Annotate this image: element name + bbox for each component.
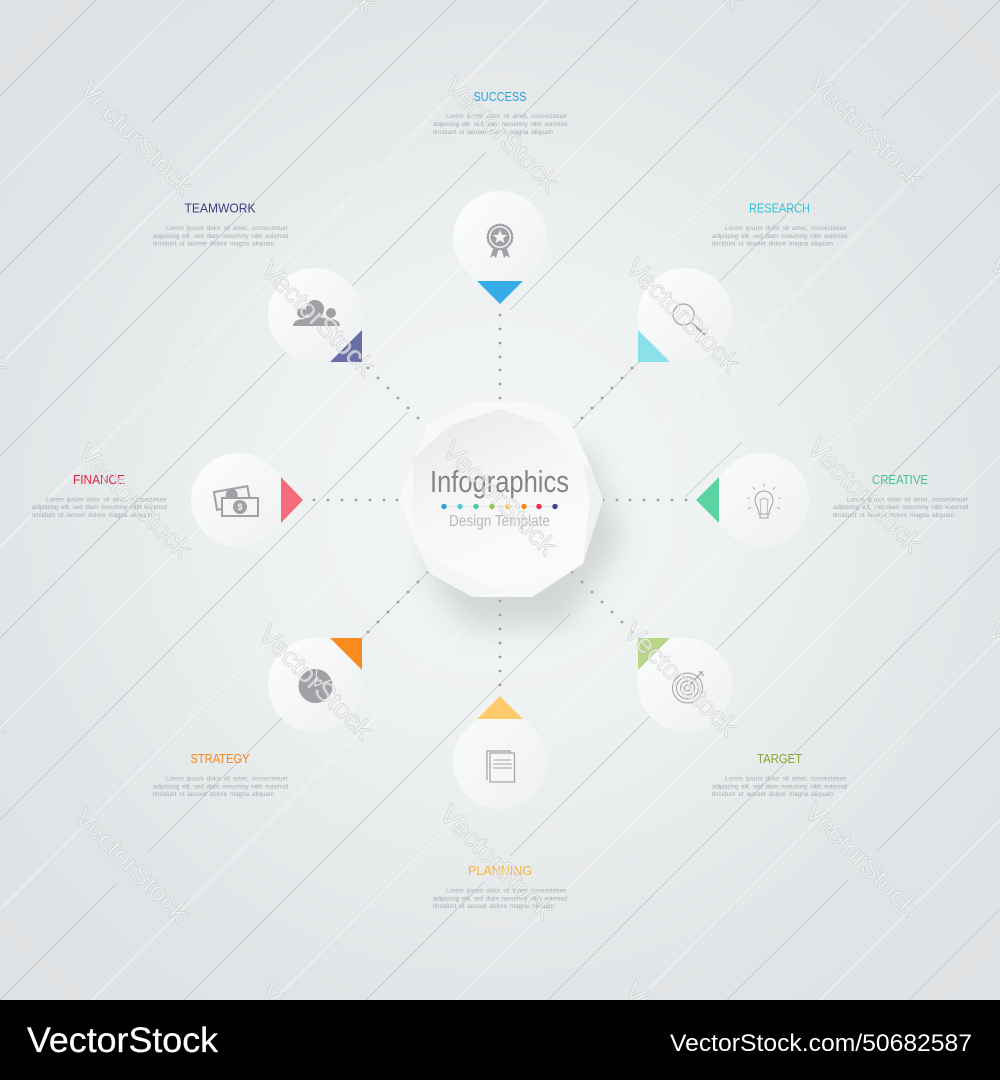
pin: strategy [268,638,362,732]
text: strategy: Lorem ipsum dolor sit amet, consectetuer [166,776,288,782]
watermarks: VectorStock [799,796,925,922]
color dots row [441,504,558,509]
icon: award badge [487,224,513,258]
text: strategy [153,776,289,798]
watermarks: VectorStock [804,67,930,193]
watermarks: VectorStock [620,252,746,378]
text: teamwork: tincidunt ut laoreet dolore magna aliquam [153,240,274,248]
pin: target [638,638,732,732]
icon: people [293,300,340,326]
heading: success: SUCCESS [474,89,527,104]
text: planning: tincidunt ut laoreet dolore magna aliquam [433,903,554,910]
panel: planning [433,696,568,910]
watermarks: VectorStock [253,619,379,745]
heading: target: TARGET [757,751,802,766]
icon: magnifier [673,304,705,335]
text: finance: Lorem ipsum dolor sit amet, consectetuer [46,496,167,504]
pin: research [638,268,732,362]
pin: success [453,191,547,304]
text: finance: adipiscing elit, sed diam nonummy nibh euismod [32,504,168,511]
footer brand: VectorStock [27,1021,219,1060]
heading: strategy: STRATEGY [190,751,250,766]
watermarks: VectorStock [618,616,744,742]
text: research: tincidunt ut laoreet dolore magna aliquam [712,240,833,248]
heading: finance: FINANCE [73,472,125,487]
watermarks: VectorStock [439,71,565,197]
text: success: adipiscing elit, sed diam nonummy nibh euismod [433,121,568,128]
icon: banknotes [214,486,258,516]
watermarks: VectorStock [434,799,560,925]
watermarks: VectorStock [69,802,195,928]
text: creative: tincidunt ut laoreet dolore magna aliquam [833,512,954,519]
icon: pie chart [298,669,332,703]
text: target: tincidunt ut laoreet dolore magna aliquam [712,791,833,798]
heading: planning: PLANNING [468,863,532,878]
text: planning: adipiscing elit, sed diam nonummy nibh euismod [433,896,568,902]
watermarks: VectorStock [255,255,381,381]
panel: teamwork [153,200,362,362]
text: target: adipiscing elit, sed diam nonummy nibh euismod [712,784,848,790]
footer bar [0,1000,1000,1080]
text: planning: Lorem ipsum dolor sit amet, consectetuer [446,888,567,894]
panel: research [638,200,848,362]
center title [430,464,569,530]
text: research [712,225,848,248]
text: strategy: adipiscing elit, sed diam nonummy nibh euismod [153,784,289,790]
subtitle: Design Template [449,513,550,530]
text: strategy: tincidunt ut laoreet dolore magna aliquam [153,791,274,798]
text: target [712,776,848,798]
text: research: Lorem ipsum dolor sit amet, consectetuer [725,225,847,232]
text: creative [833,496,969,519]
panel: finance [32,453,304,547]
text: teamwork [153,225,289,248]
watermarks: VectorStock [72,438,198,564]
footer image id: VectorStock.com/50682587 [670,1030,972,1057]
watermarks: VectorStock [802,432,928,558]
text: teamwork: adipiscing elit, sed diam nonummy nibh euismod [153,233,289,240]
heading: research: RESEARCH [749,200,810,216]
central polygon badge [399,402,622,628]
pin: creative [696,453,809,547]
text: success: tincidunt ut laoreet dolore magna aliquam [433,129,553,136]
text: target: Lorem ipsum dolor sit amet, consectetuer [725,776,847,782]
icon: target [672,671,704,703]
icon: light bulb [747,484,781,518]
text: creative: Lorem ipsum dolor sit amet, consectetuer [847,496,968,504]
panel: target [638,638,848,798]
watermarks: VectorStock [74,75,200,201]
text: creative: adipiscing elit, sed diam nonummy nibh euismod [833,504,969,511]
text: success [433,113,568,136]
dotted connectors [313,314,687,686]
text: finance: tincidunt ut laoreet dolore magna aliquam [32,512,152,519]
pin: finance [191,453,304,547]
panel: strategy [153,638,362,798]
icon: banknotes: $ [237,502,243,512]
text: planning [433,888,568,910]
panel: success [433,89,568,304]
text: finance [32,496,168,519]
icon: documents [487,751,514,782]
text: success: Lorem ipsum dolor sit amet, consectetuer [446,113,567,120]
pin: planning [453,696,547,809]
panel: creative [696,453,969,547]
heading: creative: CREATIVE [872,472,928,487]
text: teamwork: Lorem ipsum dolor sit amet, consectetuer [166,225,288,232]
pin: teamwork [268,268,362,362]
watermarks: VectorStock [437,435,563,561]
text: research: adipiscing elit, sed diam nonummy nibh euismod [712,233,848,240]
heading: teamwork: TEAMWORK [184,200,256,216]
heading: Infographics: Infographics [430,464,569,499]
